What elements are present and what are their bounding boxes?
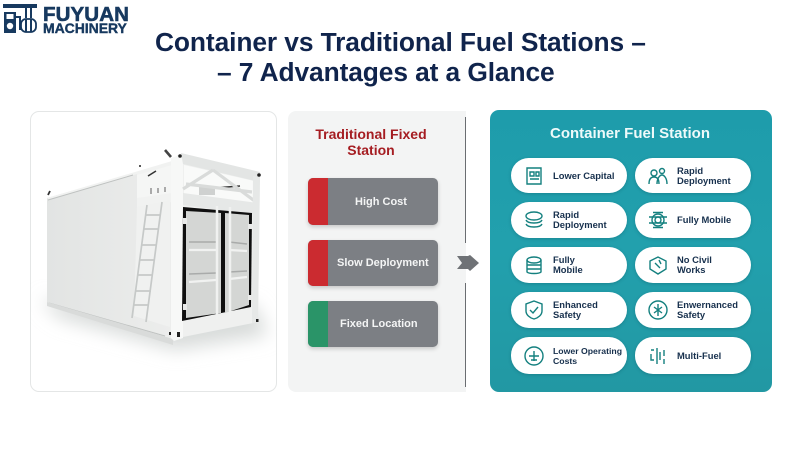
pill: rapid deployment left: Rapid	[553, 209, 579, 220]
doors	[182, 207, 252, 321]
pill: enhanced safety left	[511, 292, 627, 328]
corner castings	[139, 154, 261, 337]
logo icon	[3, 4, 37, 33]
pill: lower operating costs: Lower Operating	[553, 345, 622, 355]
bar: slow deployment	[308, 240, 438, 286]
panel heading	[315, 126, 427, 158]
door lock rods	[217, 206, 230, 319]
title: Container vs Traditional Fuel Stations –	[155, 27, 646, 57]
pill: rapid deployment right: Deployment	[677, 174, 731, 186]
pill: lower capital: Lower Capital	[553, 169, 614, 180]
pill: no civil works: No Civil	[677, 254, 712, 265]
logo	[3, 3, 129, 36]
panel: container fuel station	[490, 110, 772, 392]
pill: multi-fuel	[635, 337, 751, 374]
bar: high cost	[308, 178, 438, 225]
title	[155, 27, 646, 87]
container illustration	[44, 149, 270, 356]
side wall	[47, 162, 172, 339]
title: – 7 Advantages at a Glance	[217, 57, 555, 87]
panel heading: Traditional Fixed	[315, 126, 427, 142]
pill: enhanced safety right	[635, 292, 751, 328]
panel heading: Station	[347, 142, 395, 158]
divider line	[465, 117, 466, 243]
pill: lower operating costs	[511, 337, 627, 374]
pill: rapid deployment left: Deployment	[553, 219, 607, 230]
pill: lower operating costs: Costs	[553, 356, 577, 366]
pill: lower capital	[511, 158, 627, 193]
panel: container photo	[30, 111, 277, 392]
front opening	[184, 165, 254, 203]
ladder	[132, 202, 162, 322]
pill: enhanced safety left: Enhanced	[553, 299, 598, 310]
pill: fully mobile right	[635, 202, 751, 238]
pill: no civil works	[635, 247, 751, 283]
roof truss	[183, 170, 256, 202]
hinges and fittings	[183, 218, 252, 310]
logo wordmark	[43, 3, 129, 36]
bar: fixed location: Fixed Location	[340, 318, 418, 330]
pill: fully mobile right: Fully Mobile	[677, 214, 731, 225]
bar: slow deployment: Slow Deployment	[337, 257, 429, 269]
side opening	[137, 165, 172, 198]
top beam	[181, 153, 260, 182]
arrow	[457, 255, 479, 271]
logo wordmark: FUYUAN	[43, 3, 129, 26]
logo wordmark: MACHINERY	[43, 20, 127, 36]
bar: high cost: High Cost	[355, 196, 407, 208]
pill: rapid deployment right: Rapid	[677, 164, 703, 175]
pill: multi-fuel: Multi-Fuel	[677, 349, 721, 360]
pill: enhanced safety right: Enwernanced	[677, 299, 738, 310]
pill: fully mobile left: Mobile	[553, 264, 583, 275]
pill: rapid deployment left	[511, 202, 627, 238]
pill: fully mobile left: Fully	[553, 254, 575, 265]
ground shadow	[40, 300, 268, 350]
pill: no civil works: Works	[677, 264, 705, 275]
pill: enhanced safety right: Safety	[677, 309, 705, 320]
panel heading: Container Fuel Station	[550, 125, 710, 142]
ladder bay	[134, 200, 170, 327]
corner post	[171, 154, 183, 341]
pill: rapid deployment right	[635, 158, 751, 193]
bar: fixed location	[308, 301, 438, 347]
lower beam	[183, 193, 258, 215]
panel: traditional fixed station	[288, 111, 466, 392]
pill: enhanced safety left: Safety	[553, 309, 581, 320]
front frame	[173, 155, 260, 339]
pill: fully mobile left	[511, 247, 627, 283]
